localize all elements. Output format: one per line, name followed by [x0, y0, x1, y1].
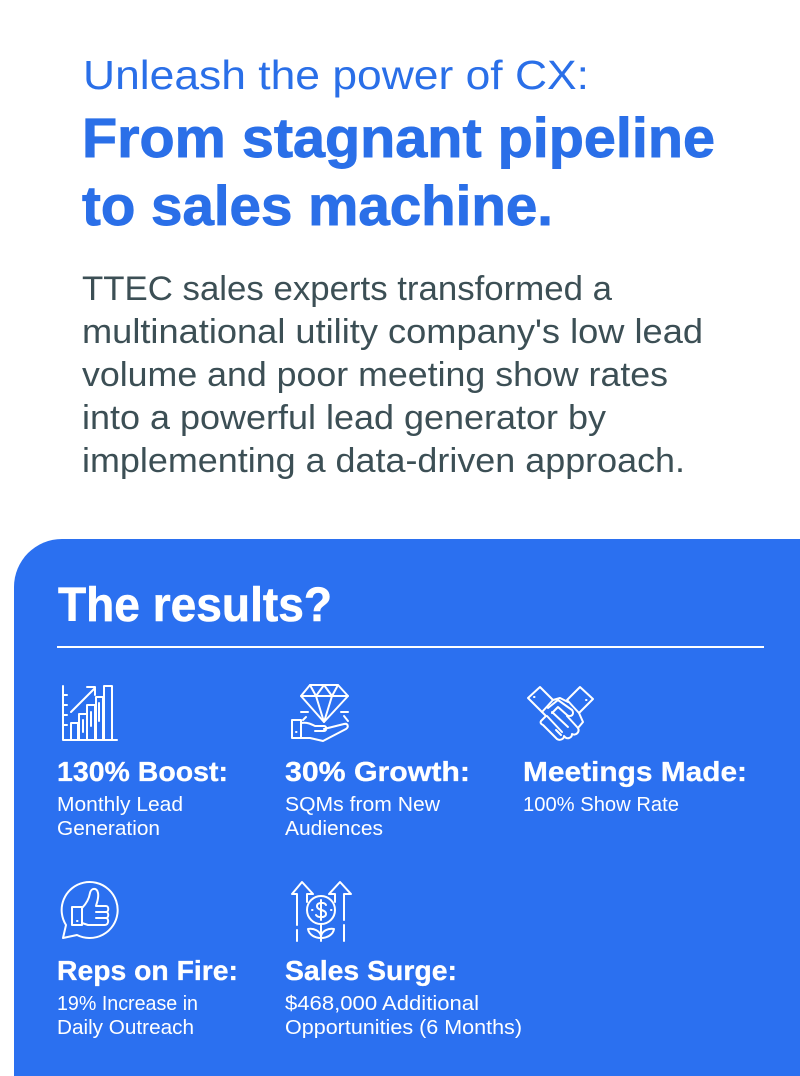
- title: Unleash the power of CX:: [83, 52, 589, 98]
- stat heading: Sales Surge:: [285, 955, 457, 986]
- results heading: The results?: [58, 579, 332, 632]
- stat: SQMs from new audiences: [285, 685, 470, 840]
- stat detail: [285, 993, 522, 1039]
- intro text block: implementing a data-driven approach.: [82, 442, 685, 480]
- stat: daily outreach: [57, 882, 238, 1039]
- stat detail: [57, 993, 198, 1039]
- panel: results: [14, 539, 800, 1076]
- icon: thumbs up speech bubble: [62, 882, 118, 938]
- icon: handshake: [528, 687, 593, 740]
- stat detail: Daily Outreach: [57, 1017, 194, 1039]
- stat: additional opportunities: [285, 882, 522, 1039]
- intro text block: [82, 270, 703, 480]
- icon: money plant with arrows: [292, 882, 351, 941]
- stat detail: Opportunities (6 Months): [285, 1017, 522, 1039]
- stat detail: Audiences: [285, 818, 383, 840]
- stat detail: [285, 794, 441, 840]
- intro text block: TTEC sales experts transformed a: [82, 270, 612, 308]
- title: to sales machine.: [82, 174, 553, 237]
- stat detail: $468,000 Additional: [285, 993, 479, 1015]
- stat heading: 30% Growth:: [285, 756, 470, 787]
- stat: monthly lead generation: [57, 686, 228, 840]
- stat detail: Generation: [57, 818, 160, 840]
- intro text block: volume and poor meeting show rates: [82, 356, 668, 394]
- icon: rising bar chart: [63, 686, 117, 740]
- stat: meetings made: [523, 687, 747, 816]
- stat heading: Meetings Made:: [523, 756, 747, 787]
- stat detail: 19% Increase in: [57, 993, 198, 1015]
- panel background: [14, 539, 800, 1076]
- stat detail: 100% Show Rate: [523, 794, 679, 816]
- icon: diamond over hand: [292, 685, 348, 741]
- title: From stagnant pipeline: [82, 106, 715, 169]
- stat heading: Reps on Fire:: [57, 955, 238, 986]
- title: [82, 52, 715, 237]
- stat detail: Monthly Lead: [57, 794, 183, 816]
- stat detail: [57, 794, 183, 840]
- intro text block: into a powerful lead generator by: [82, 399, 606, 437]
- stat detail: SQMs from New: [285, 794, 441, 816]
- stat heading: 130% Boost:: [57, 756, 228, 787]
- intro text block: multinational utility company's low lead: [82, 313, 703, 351]
